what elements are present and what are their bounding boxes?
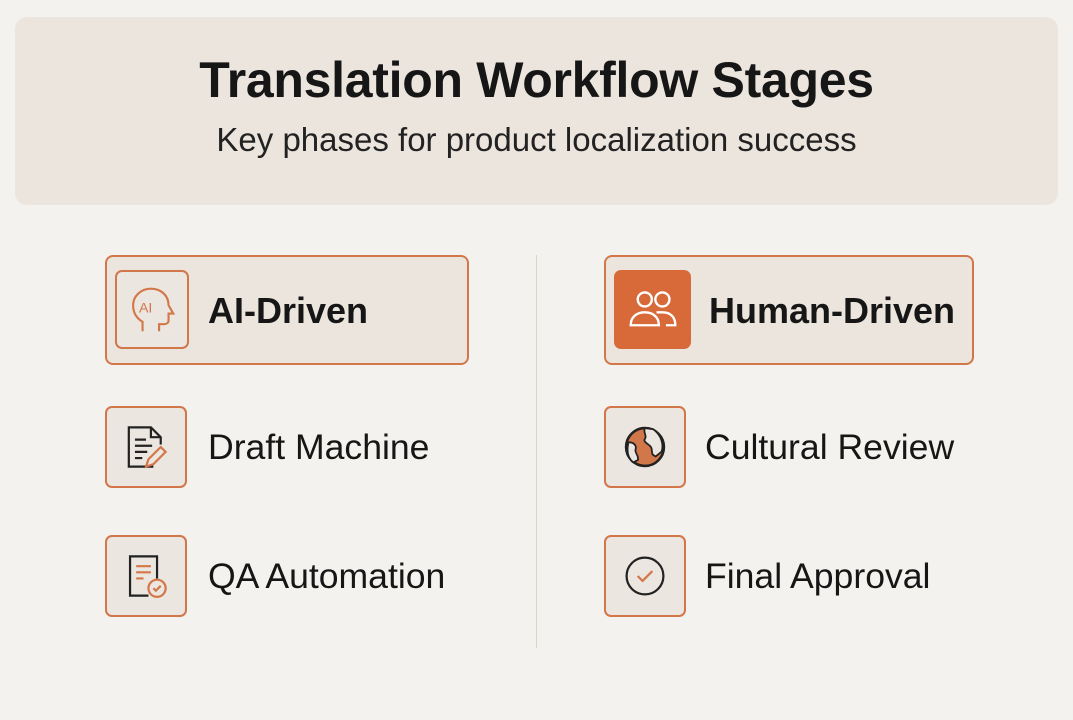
icon: document pencil (105, 406, 187, 488)
icon: AI head (115, 270, 189, 349)
title: Translation Workflow Stages (199, 52, 874, 108)
label: Cultural Review (705, 427, 954, 467)
divider (536, 255, 537, 648)
item: Cultural Review (604, 406, 954, 488)
label: Draft Machine (208, 427, 429, 467)
label: Human-Driven (709, 290, 955, 331)
item: QA Automation (105, 535, 445, 617)
label: AI-Driven (208, 290, 368, 331)
panel: Human-Driven header (604, 255, 974, 365)
item: Final Approval (604, 535, 930, 617)
subtitle: Key phases for product localization success (216, 121, 857, 158)
panel: AI-Driven header (105, 255, 469, 365)
icon: doc check (105, 535, 187, 617)
label: Final Approval (705, 556, 930, 596)
label: QA Automation (208, 556, 445, 596)
icon: AI head: AI (139, 300, 152, 316)
header panel (15, 17, 1058, 205)
icon: people (614, 270, 691, 349)
item: Draft Machine (105, 406, 429, 488)
icon: check circle (604, 535, 686, 617)
icon: globe (604, 406, 686, 488)
